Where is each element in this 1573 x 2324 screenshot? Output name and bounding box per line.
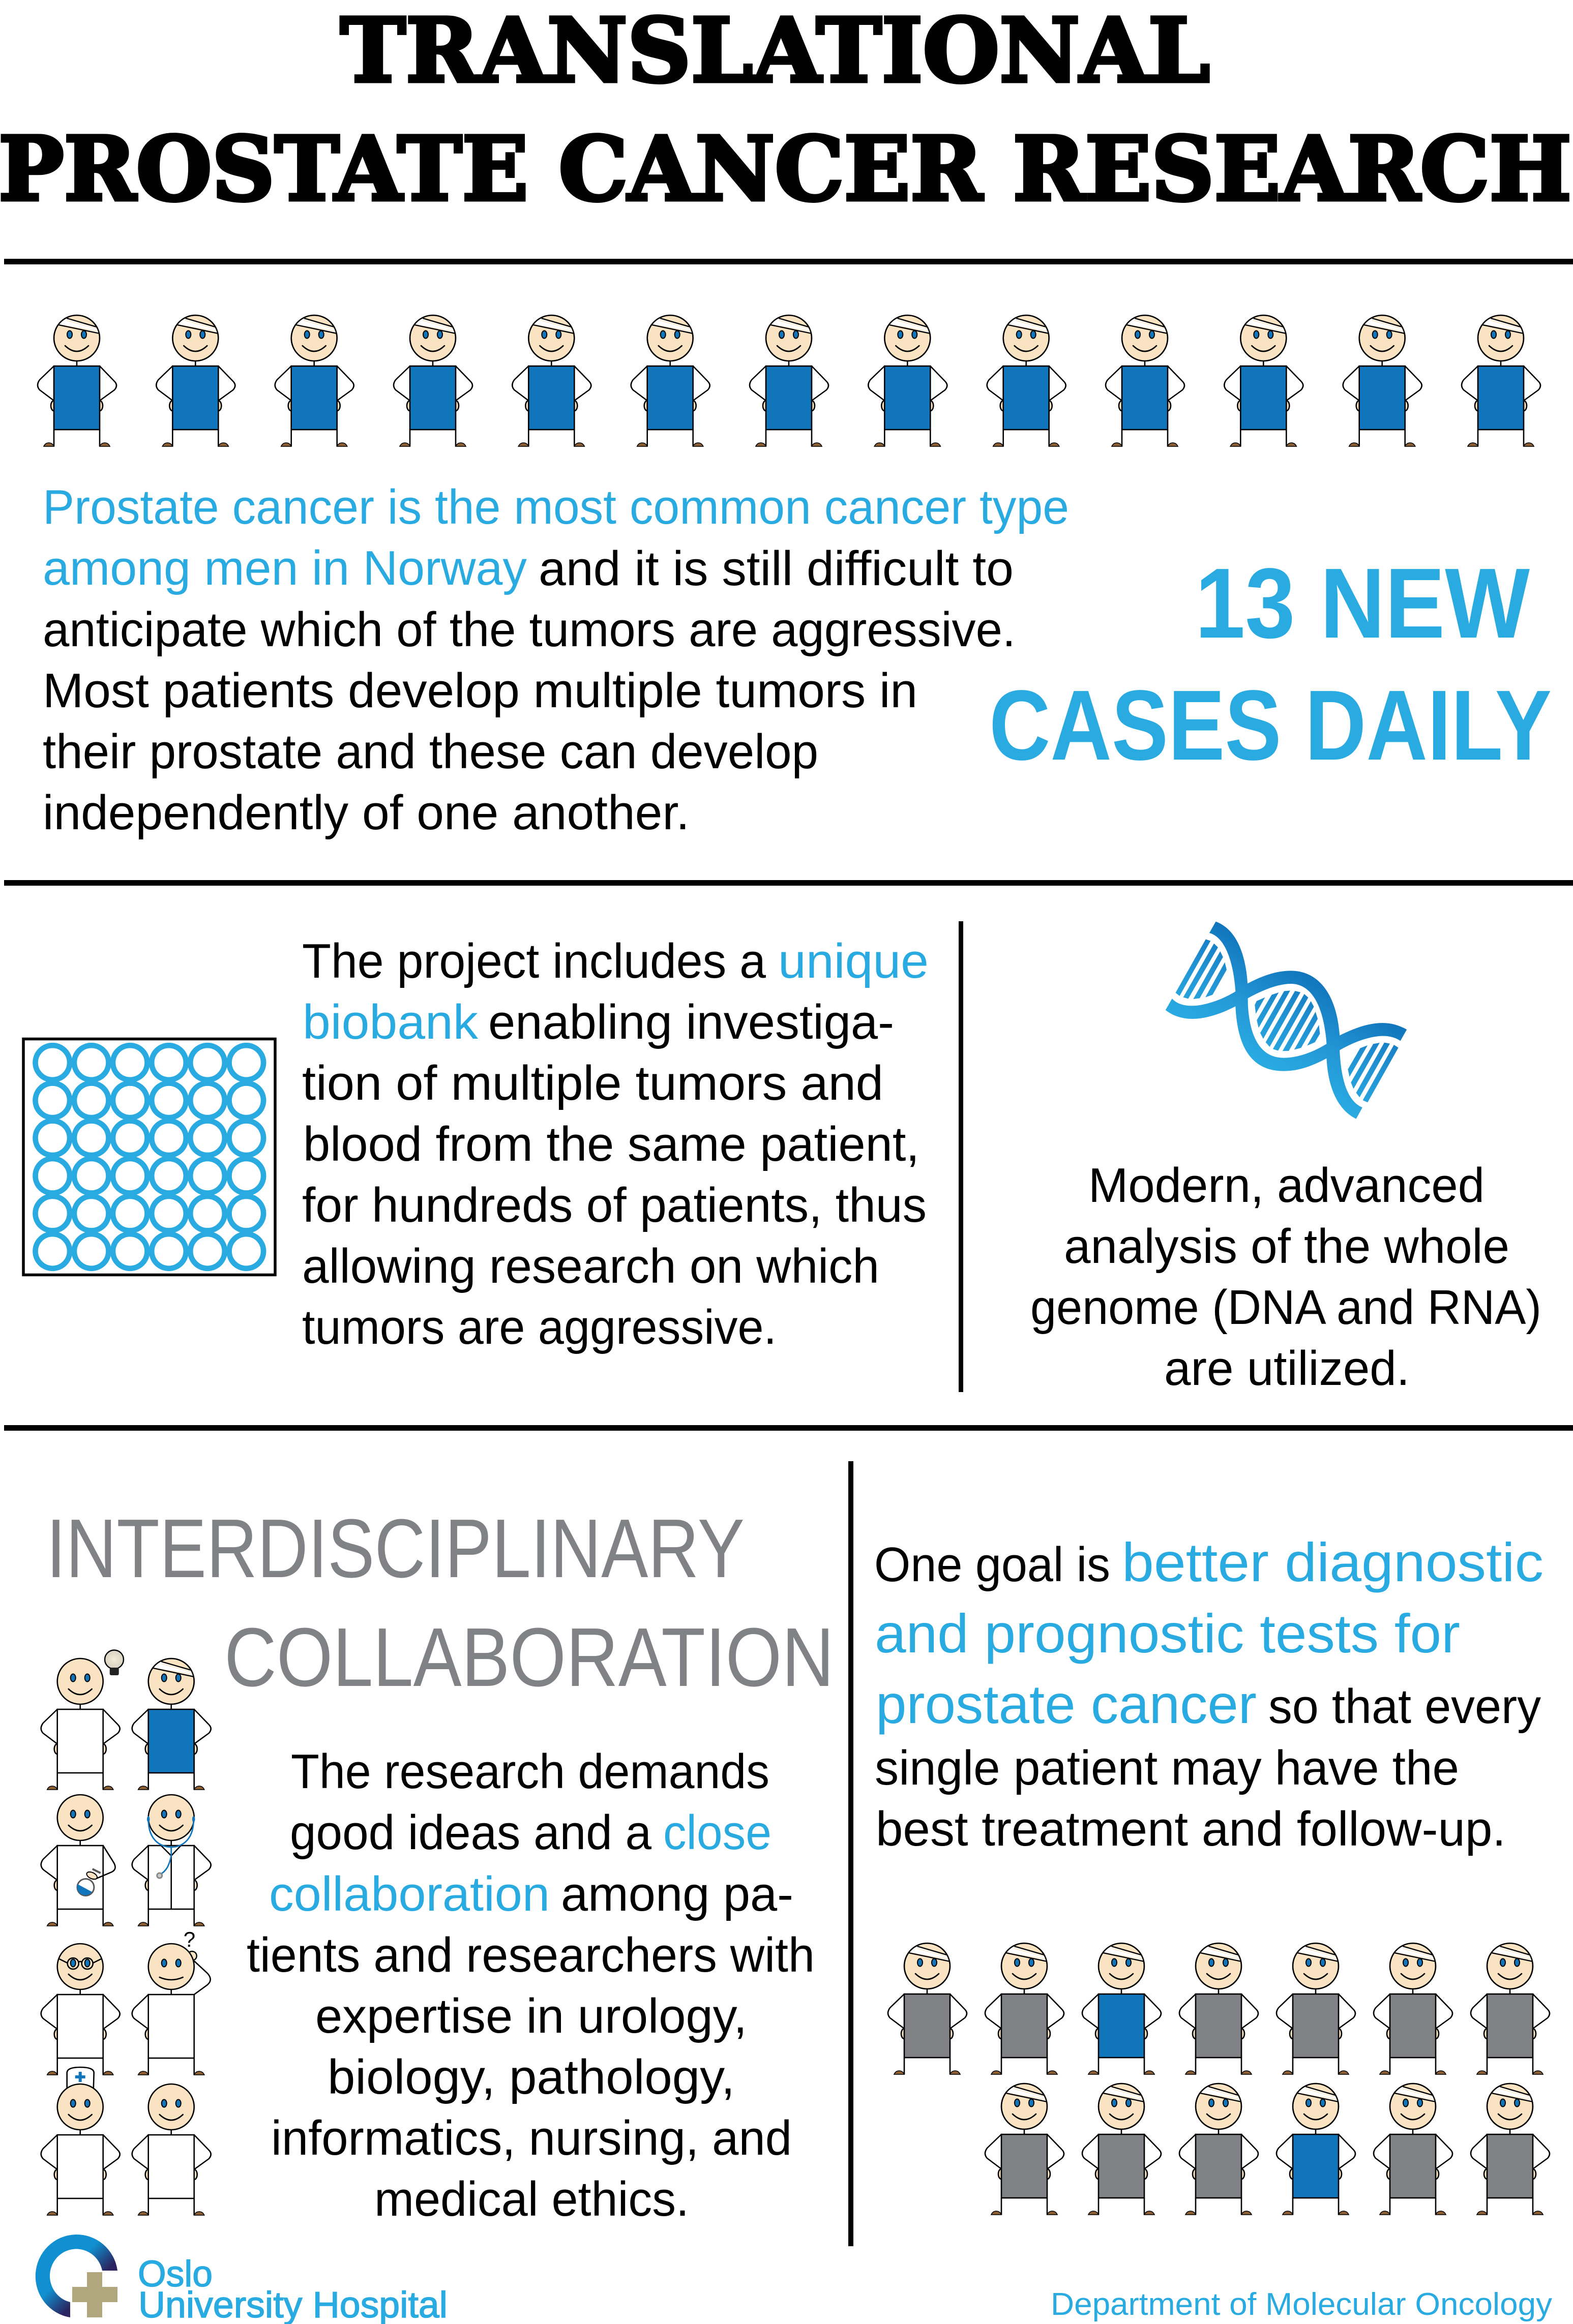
goal text block: best treatment and follow-up. (876, 1802, 1506, 1856)
goal text block: better diagnostic (1122, 1531, 1544, 1593)
patients: gray and blue group (888, 1943, 1550, 2215)
team of collaborators (41, 1650, 211, 2215)
genome text block: analysis of the whole (1064, 1219, 1509, 1274)
figure: person with glasses (41, 1944, 120, 2075)
biobank text block: tion of multiple tumors and (302, 1056, 883, 1110)
collaboration text block (247, 1744, 815, 2226)
figure: person with question: ? (184, 1927, 195, 1951)
intro text block (43, 480, 1069, 840)
figure: doctor with stethoscope (132, 1795, 211, 1926)
heading: interdisciplinary collaboration: INTERDISCIPLINARY (46, 1502, 745, 1595)
footer: department: Department of Molecular Oncology (1051, 2287, 1552, 2322)
goal text block: single patient may have the (875, 1741, 1459, 1795)
biobank text block: tumors are aggressive. (302, 1300, 777, 1354)
goal text block: One goal is (874, 1537, 1110, 1592)
figure: researcher with flask (41, 1795, 115, 1926)
goal text block: and prognostic tests for (875, 1603, 1460, 1664)
logo: Oslo University Hospital (36, 2235, 448, 2324)
biobank text block: for hundreds of patients, thus (302, 1178, 927, 1232)
intro text block: anticipate which of the tumors are aggressive. (43, 602, 1016, 657)
intro text block: Prostate cancer is the most common cancer type (43, 480, 1069, 534)
intro text block: and it is still difficult to (539, 541, 1014, 596)
logo: Oslo University Hospital: Oslo (138, 2254, 213, 2295)
figure: person with question (132, 1927, 211, 2075)
intro text block: Most patients develop multiple tumors in (43, 663, 917, 718)
biobank text block: The project includes a (302, 934, 766, 988)
figure: person with idea (41, 1650, 124, 1790)
row of 13 patients (38, 315, 1540, 446)
title: PROSTATE CANCER RESEARCH (0, 117, 1571, 221)
genome text block: Modern, advanced (1088, 1158, 1485, 1213)
intro text block: independently of one another. (43, 786, 690, 840)
genome text block: are utilized. (1164, 1341, 1410, 1396)
intro text block: their prostate and these can develop (43, 725, 818, 779)
biobank text block: allowing research on which (302, 1239, 879, 1293)
genome text block (1030, 1158, 1541, 1396)
callout: 13 new cases daily (989, 548, 1552, 781)
intro text block: among men in Norway (43, 541, 527, 595)
figure: patient (132, 1658, 211, 1790)
genome text block: genome (DNA and RNA) (1030, 1280, 1541, 1335)
collaboration text block: informatics, nursing, and (271, 2111, 792, 2165)
biobank text block: unique (778, 934, 929, 988)
collaboration text block: among pa- (561, 1867, 793, 1921)
collaboration text block: expertise in urology, (315, 1989, 747, 2043)
title (0, 0, 1571, 221)
goal text block (874, 1531, 1544, 1856)
collaboration text block: collaboration (269, 1867, 550, 1921)
biobank text block: blood from the same patient, (303, 1117, 919, 1171)
title: TRANSLATIONAL (340, 0, 1210, 102)
biobank text block: biobank (303, 995, 479, 1049)
callout: 13 new cases daily: 13 NEW (1195, 548, 1530, 659)
heading: interdisciplinary collaboration: COLLABORATION (224, 1611, 834, 1704)
collaboration text block: good ideas and a (290, 1805, 652, 1860)
collaboration text block: medical ethics. (374, 2172, 689, 2226)
icon: DNA helix (1166, 922, 1407, 1119)
icon: biobank plate (23, 1039, 275, 1275)
biobank text block (302, 934, 929, 1354)
figure: nurse (41, 2067, 120, 2215)
goal text block: prostate cancer (876, 1673, 1257, 1735)
goal text block: so that every (1268, 1679, 1541, 1734)
collaboration text block: The research demands (291, 1744, 769, 1799)
biobank text block: enabling investiga- (488, 995, 894, 1049)
collaboration text block: biology, pathology, (328, 2050, 735, 2104)
figure: person (132, 2084, 211, 2215)
collaboration text block: close (663, 1805, 771, 1860)
collaboration text block: tients and researchers with (247, 1928, 815, 1982)
heading: interdisciplinary collaboration (46, 1502, 834, 1704)
